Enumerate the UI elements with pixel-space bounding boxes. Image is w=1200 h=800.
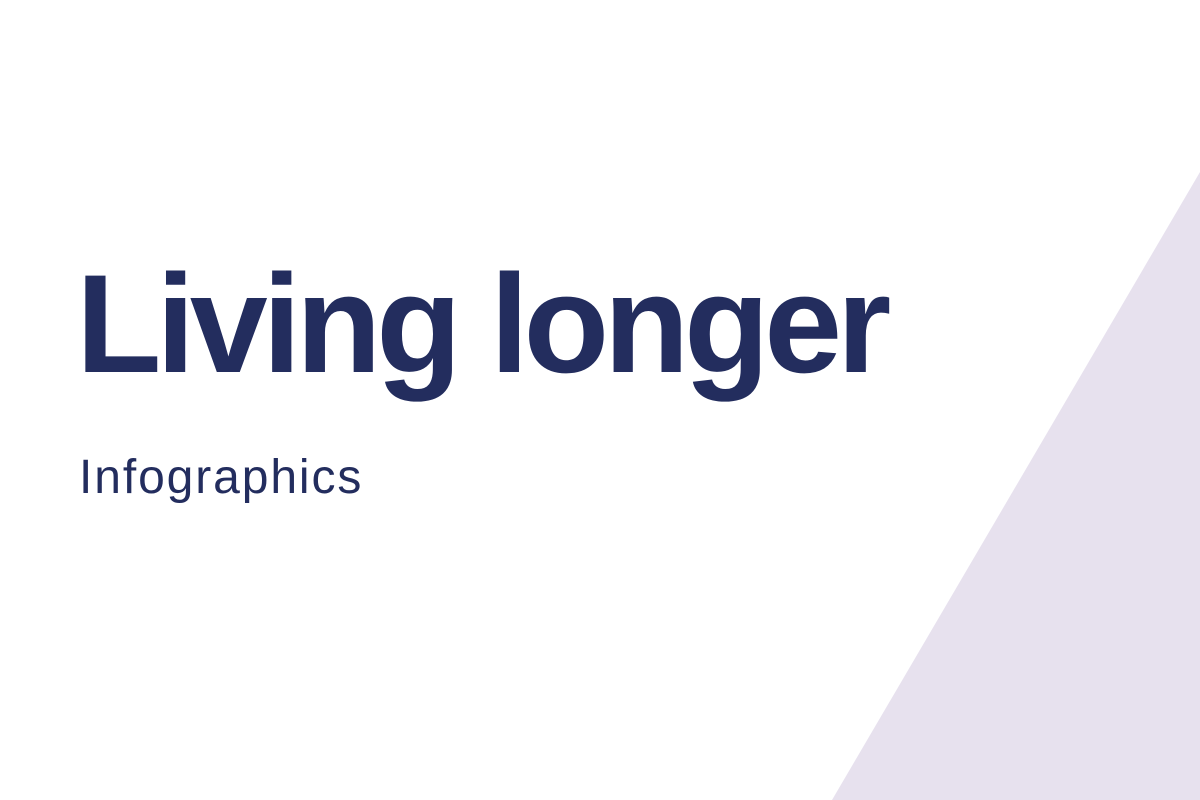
subtitle: Infographics	[79, 451, 363, 504]
title: Living longer	[76, 245, 886, 402]
